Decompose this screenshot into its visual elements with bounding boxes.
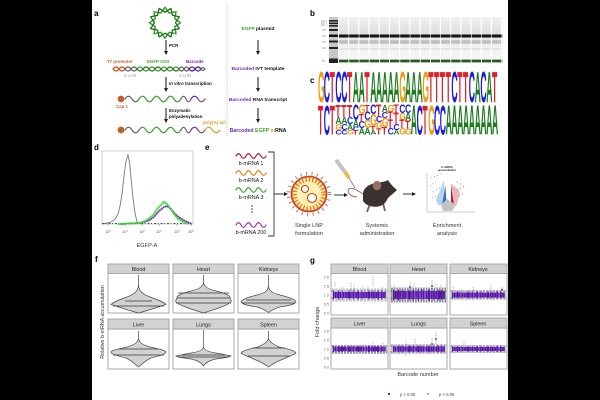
logo row 2 conserved letters: T: [422, 97, 428, 144]
logo row 2 conserved letters: C: [324, 97, 330, 144]
logo row 2 degenerate stacks: [335, 100, 412, 138]
panel d: flow cytometry histogram: [94, 143, 194, 249]
logo row 1: G: [399, 62, 406, 112]
legend: p < 0.05: [439, 392, 455, 397]
logo row 2 degenerate stacks: T: [370, 124, 375, 133]
logo row 2 conserved letters: A: [411, 97, 417, 144]
x tick labels: 5: [192, 230, 194, 232]
logo row 2 degenerate stacks: G: [399, 111, 406, 123]
logo row 1: A: [486, 62, 492, 112]
logo row 1: A: [353, 62, 359, 112]
logo row 2 conserved letters: A: [469, 97, 475, 144]
facet: Blood scatter: [331, 264, 388, 315]
logo row 2 degenerate stacks: C: [370, 103, 376, 118]
logo row 2 conserved letters: A: [446, 97, 452, 144]
legend: p > 0.05: [400, 392, 416, 397]
plot frame: [102, 151, 193, 224]
x tick labels: [105, 230, 194, 234]
label: 3' UTR: 3' UTR: [179, 73, 191, 78]
logo row 2 conserved letters: A: [486, 97, 492, 144]
x tick labels: 10: [174, 230, 178, 234]
RNA transcript wave: [125, 96, 205, 102]
cap circle final: [118, 127, 124, 133]
facet: Liver: [108, 319, 169, 369]
label: single LNP formulation: formulation: [295, 231, 323, 237]
facet: Kidneys scatter: [450, 264, 507, 315]
logo row 1: A: [405, 62, 411, 112]
logo row 2 degenerate stacks: C: [341, 122, 347, 132]
arrow: polyadenylation: [165, 108, 167, 122]
panel label f: f: [95, 255, 98, 264]
logo row 1: T: [428, 62, 433, 112]
logo row 1: A: [370, 62, 376, 112]
facet: Spleen scatter: [450, 318, 507, 369]
main mRNA band: [339, 34, 502, 38]
facet: Kidneys scatter: Kidneys: [468, 267, 488, 273]
logo row 2 degenerate stacks: G: [359, 103, 365, 118]
logo row 2 degenerate stacks: T: [335, 102, 341, 121]
logo row 2 degenerate stacks: C: [335, 129, 342, 136]
arrow: PCR: [165, 40, 167, 54]
logo row 2 degenerate stacks: C: [393, 122, 400, 132]
x axis ticks: [108, 224, 191, 226]
y axis ticks row 1: 1.5: [324, 284, 329, 288]
logo row 2 degenerate stacks: T: [364, 103, 370, 115]
icon: mouse: [348, 180, 397, 212]
facet: Heart: [173, 264, 234, 313]
gel lanes: [339, 17, 502, 63]
y axis ticks row 1: [324, 276, 329, 316]
panel g: fold change scatter: [310, 256, 507, 397]
arrow: in vitro transcription: [165, 77, 167, 91]
label: Barcode: Barcode: [186, 59, 204, 64]
y axis ticks row 1: 1.0: [324, 294, 329, 298]
x tick labels: 10: [105, 230, 109, 234]
cap circle: [118, 96, 124, 102]
control histogram grey: [102, 155, 140, 224]
logo row 2 degenerate stacks: A: [341, 115, 348, 127]
facet: Heart scatter: [390, 264, 447, 315]
logo row 2 degenerate stacks: A: [405, 112, 412, 124]
x tick labels: 0: [109, 230, 111, 232]
logo row 2 degenerate stacks: G: [376, 120, 383, 132]
facet: Blood: [108, 264, 169, 313]
logo row 2 degenerate stacks: A: [347, 122, 353, 132]
x tick labels: 3: [160, 230, 162, 232]
label: Cap 1: Cap 1: [116, 104, 129, 109]
logo row 2 degenerate stacks: A: [335, 115, 342, 127]
logo row 2 degenerate stacks: T: [393, 109, 399, 128]
green marker band: [339, 60, 502, 62]
logo row 2 conserved letters: A: [451, 97, 458, 144]
logo row 2 degenerate stacks: T: [388, 111, 393, 123]
logo row 2 degenerate stacks: T: [376, 127, 382, 136]
logo row 1: T: [364, 62, 370, 112]
logo row 2 degenerate stacks: T: [347, 102, 353, 121]
ellipsis dots: [251, 205, 253, 213]
logo row 2 degenerate stacks: G: [364, 119, 371, 131]
logo row 1: A: [475, 62, 481, 112]
logo row 2 degenerate stacks: A: [353, 118, 359, 130]
logo row 1: A: [417, 62, 423, 112]
panel label b: b: [310, 9, 315, 18]
logo row 2 degenerate stacks: A: [359, 126, 365, 137]
logo row 2 degenerate stacks: C: [364, 111, 371, 123]
logo row 2 degenerate stacks: A: [364, 126, 371, 137]
label: in vitro transcription: In vitro transcription: [169, 81, 212, 86]
logo row 2 degenerate stacks: C: [353, 125, 360, 133]
logo row 2 degenerate stacks: T: [341, 102, 347, 121]
arrow to mouse: [334, 194, 347, 196]
y axis ticks row 1: 0.5: [324, 302, 329, 306]
faint low band: [339, 48, 502, 50]
logo row 2 degenerate stacks: C: [353, 100, 359, 125]
logo row 2 degenerate stacks: C: [405, 104, 412, 116]
DNA template double strand: [113, 67, 205, 71]
logo row 2 degenerate stacks: T: [353, 130, 359, 136]
y axis ticks row 1: 0.0: [324, 312, 329, 316]
logo row 2 degenerate stacks: G: [399, 126, 406, 137]
x tick labels: 10: [188, 230, 192, 234]
icon: syringe: [336, 160, 355, 188]
arrow to LNP: [274, 193, 287, 195]
logo row 1: A: [411, 62, 417, 112]
logo row 2 degenerate stacks: T: [376, 101, 381, 120]
label b-mRNA 3: b-mRNA 3: [239, 195, 263, 201]
x tick labels: 10: [139, 230, 143, 234]
logo row 2 conserved letters: G: [428, 97, 435, 144]
x tick labels: 4: [178, 230, 180, 232]
label b-mRNA 1: b-mRNA 1: [239, 161, 263, 167]
logo row 2 conserved letters: A: [492, 97, 498, 144]
x axis title: EGFP-A: [137, 243, 158, 249]
label: enrichment analysis: Enrichment: [433, 223, 461, 229]
y axis title: Fold change: [315, 307, 321, 337]
final mRNA wave: [125, 127, 220, 133]
logo row 1: T: [492, 62, 497, 112]
x tick labels: 2: [143, 230, 145, 232]
facet: Liver: Liver: [133, 322, 145, 328]
baseline noise: [102, 222, 193, 224]
label: enzymatic polyadenylation: Enzymatic: [169, 108, 191, 113]
logo row 2 conserved letters: A: [457, 97, 463, 144]
panel a right: process steps: [229, 26, 287, 134]
facet: Lungs: [173, 319, 234, 369]
logo row 1: A: [393, 62, 400, 112]
step: EGFP plasmid: EGFP plasmid: [241, 26, 275, 32]
logo row 2 conserved letters: A: [475, 97, 481, 144]
logo row 1: G: [318, 62, 325, 112]
panel label c: c: [310, 76, 315, 85]
panel e: in vivo screening workflow: [205, 143, 475, 237]
facet: Heart scatter: Heart: [412, 267, 426, 273]
y axis ticks row 2: 1.0: [324, 348, 329, 352]
facet: Lungs: Lungs: [196, 322, 211, 328]
facet: Spleen: [238, 319, 299, 369]
label: EGFP CDS: EGFP CDS: [147, 59, 169, 64]
x tick labels: 1: [126, 230, 128, 232]
icon: LNP: [288, 174, 330, 214]
y axis ticks row 2: 0.5: [324, 356, 329, 360]
facet: Liver scatter: [331, 318, 388, 369]
logo row 2 degenerate stacks: C: [347, 115, 353, 127]
logo row 2 degenerate stacks: C: [382, 110, 388, 120]
step: barcoded EGFP mRNA: Barcoded EGFP mRNA: [230, 128, 287, 134]
x axis title: Barcode number: [397, 372, 439, 378]
logo row 2 conserved letters: T: [330, 97, 335, 144]
logo row 1: C: [341, 62, 347, 112]
wave b-mRNA 1: [236, 154, 266, 158]
label: poly(A) tail: poly(A) tail: [203, 120, 226, 125]
logo row 2 degenerate stacks: C: [341, 129, 348, 136]
arrow step 2: [257, 77, 259, 91]
logo row 1: C: [335, 62, 342, 112]
ladder tick labels: [321, 21, 327, 61]
panel b: capillary gel: [310, 9, 502, 63]
wave b-mRNA 3: [236, 188, 266, 192]
legend: [388, 392, 455, 397]
chart: volcano plot: [427, 165, 475, 212]
logo row 2 degenerate stacks: G: [347, 129, 354, 136]
logo row 2 conserved letters: C: [434, 97, 440, 144]
facet: Lungs scatter: [390, 318, 447, 369]
logo row 1: A: [359, 62, 365, 112]
panel f: violin plots: [95, 255, 299, 369]
chart: volcano plot: b-mRNA: [441, 165, 453, 169]
logo row 2 degenerate stacks: T: [399, 119, 405, 131]
facet: Kidneys: [238, 264, 299, 313]
logo row 1: C: [480, 62, 487, 112]
logo row 2 conserved letters: T: [318, 97, 323, 144]
facet: Spleen scatter: Spleen: [470, 322, 486, 328]
arrow step 1: [257, 40, 259, 54]
logo row 2 degenerate stacks: C: [399, 104, 406, 116]
label: systemic administration: administration: [360, 231, 394, 237]
logo row 2 degenerate stacks: G: [382, 116, 389, 131]
logo row 1: A: [388, 62, 394, 112]
logo row 2 degenerate stacks: C: [388, 126, 394, 137]
label: enzymatic polyadenylation: polyadenylation: [169, 114, 203, 119]
y axis ticks row 2: 1.5: [324, 338, 329, 342]
logo row 2 degenerate stacks: A: [382, 103, 388, 115]
facet: Spleen: Spleen: [260, 322, 277, 328]
logo row 2 conserved letters: A: [463, 97, 469, 144]
logo row 2 degenerate stacks: A: [393, 129, 400, 136]
panel label d: d: [94, 143, 99, 152]
green histogram: [118, 202, 188, 224]
y axis ticks row 2: [324, 330, 329, 370]
label: enrichment analysis: analysis: [437, 231, 457, 237]
facet: Blood scatter: Blood: [353, 267, 366, 273]
bracket: [268, 152, 274, 236]
panel c: sequence logo: [310, 62, 498, 144]
logo row 2 degenerate stacks: T: [359, 112, 364, 124]
chart: volcano plot: accumulation: [438, 168, 456, 172]
logo row 2 conserved letters: C: [417, 97, 423, 144]
facet: Kidneys: Kidneys: [259, 267, 278, 273]
wave b-mRNA 200: [236, 223, 266, 227]
label: T7 promoter: T7 promoter: [107, 59, 133, 64]
logo row 1: T: [463, 62, 468, 112]
logo row 1: [318, 62, 497, 112]
logo row 1: C: [324, 62, 330, 112]
arrow to enrichment: [403, 193, 415, 195]
y axis ticks row 2: 2.0: [324, 330, 329, 334]
label: 5' UTR: 5' UTR: [124, 73, 136, 78]
step: barcoded IVT template: Barcoded IVT template: [231, 66, 285, 72]
logo row 2 degenerate stacks: G: [388, 103, 394, 115]
wave b-mRNA 2: [236, 171, 266, 175]
label: single LNP formulation: Single LNP: [295, 223, 323, 229]
logo row 2 conserved letters: [318, 97, 498, 144]
logo row 2 conserved letters: C: [440, 97, 446, 144]
panel label a: a: [94, 9, 99, 18]
y axis title: Relative b-mRNA accumulation: [100, 285, 106, 359]
logo row 2 degenerate stacks: A: [370, 130, 376, 136]
icon: EGFP plasmid ring: [150, 7, 180, 38]
panel label g: g: [310, 256, 315, 265]
logo row 1: T: [446, 62, 451, 112]
step: barcoded RNA transcript: Barcoded RNA transcript: [229, 97, 287, 103]
facet: Liver scatter: Liver: [354, 322, 366, 328]
label: PCR: PCR: [169, 43, 179, 48]
facet: Blood: Blood: [132, 267, 145, 273]
logo row 1: T: [434, 62, 439, 112]
label b-mRNA 2: b-mRNA 2: [239, 178, 263, 184]
logo row 2 degenerate stacks: T: [393, 104, 399, 116]
facet: Lungs scatter: Lungs: [411, 322, 426, 328]
logo row 2 degenerate stacks: T: [388, 119, 393, 131]
logo row 1: T: [457, 62, 462, 112]
secondary band: [339, 40, 502, 44]
logo row 2 degenerate stacks: G: [335, 122, 342, 132]
purple histogram: [120, 206, 192, 224]
label b-mRNA 200: b-mRNA 200: [236, 230, 266, 236]
logo row 1: G: [422, 62, 429, 112]
logo row 2 degenerate stacks: G: [370, 111, 377, 130]
logo row 2 degenerate stacks: C: [359, 119, 365, 131]
logo row 1: C: [451, 62, 458, 112]
y axis ticks row 2: 0.0: [324, 366, 329, 370]
logo row 2 degenerate stacks: T: [405, 120, 411, 132]
logo row 1: A: [382, 62, 388, 112]
facet: Heart: Heart: [197, 267, 211, 273]
logo row 2 degenerate stacks: T: [382, 126, 387, 138]
arrow step 3: [257, 108, 259, 122]
panel a: mRNA construct workflow: [94, 7, 226, 133]
x tick labels: 10: [122, 230, 126, 234]
logo row 1: A: [376, 62, 382, 112]
y axis ticks row 1: 2.0: [324, 276, 329, 280]
logo row 2 degenerate stacks: C: [376, 114, 382, 124]
logo row 2 conserved letters: A: [480, 97, 487, 144]
logo row 2 degenerate stacks: G: [405, 127, 412, 136]
panel label e: e: [205, 143, 210, 152]
logo row 1: T: [440, 62, 445, 112]
label: systemic administration: Systemic: [366, 223, 388, 229]
logo row 1: T: [347, 62, 352, 112]
logo row 1: C: [469, 62, 475, 112]
ladder lane: [329, 17, 338, 63]
logo row 1: T: [330, 62, 335, 112]
x tick labels: 10: [156, 230, 160, 234]
